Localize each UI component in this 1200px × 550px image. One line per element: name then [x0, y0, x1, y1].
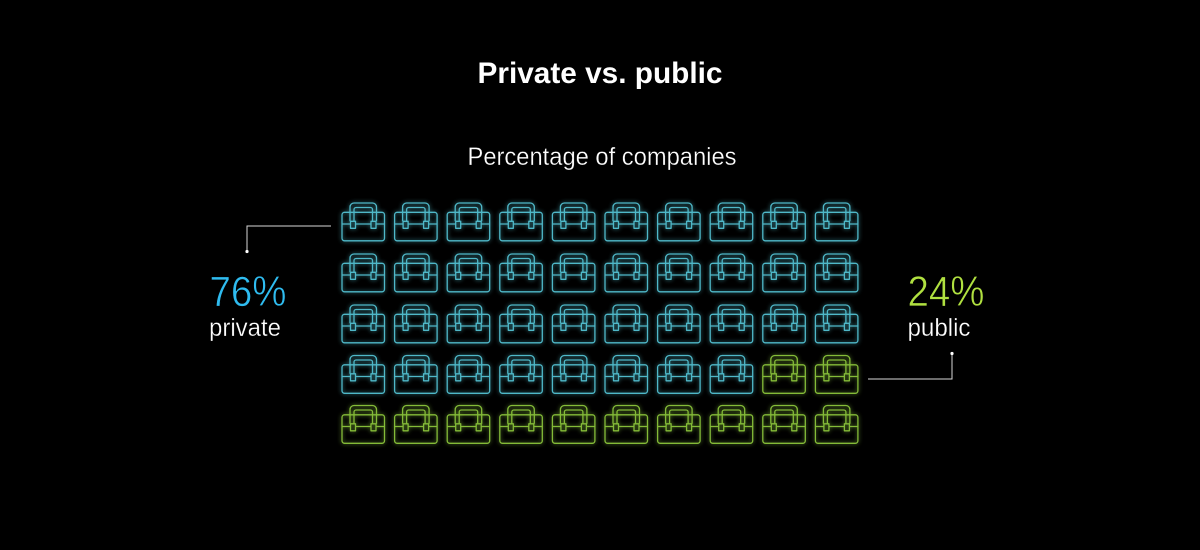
title: Private vs. public: [478, 57, 722, 90]
callout: public: [868, 268, 984, 379]
stat: 76%: 76%: [210, 268, 286, 316]
callout: private: [209, 226, 331, 342]
subtitle: Percentage of companies: [468, 143, 736, 171]
label: public: public: [908, 314, 970, 342]
leader line: private: [245, 226, 331, 253]
leader line: public: [868, 352, 954, 379]
icon grid: public companies, green briefcases: [342, 356, 858, 443]
label: private: private: [209, 314, 281, 342]
icon grid: private companies, blue briefcases: [342, 203, 858, 393]
stat: 24%: 24%: [908, 268, 984, 316]
